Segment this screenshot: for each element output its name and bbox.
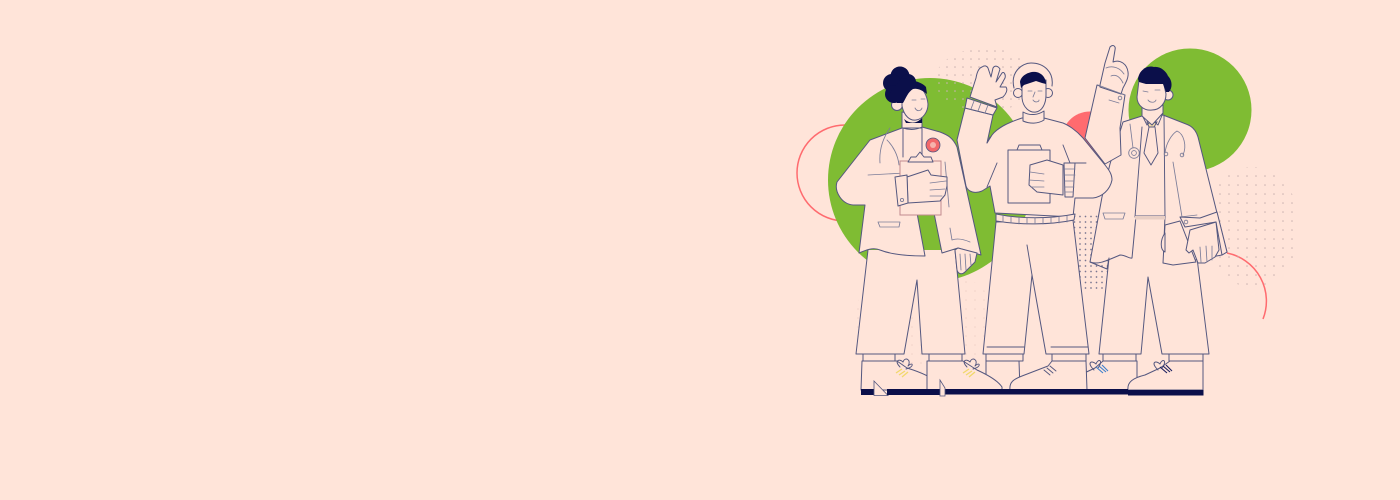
socks	[986, 354, 1086, 361]
head	[883, 66, 928, 120]
trousers	[1099, 258, 1209, 354]
waistband	[996, 214, 1075, 224]
socks	[863, 354, 962, 361]
hand with folder	[1186, 222, 1219, 263]
head	[1137, 67, 1173, 125]
shirt and tie	[1135, 113, 1165, 220]
shoe notch	[874, 381, 888, 396]
pointing hand	[1100, 46, 1128, 94]
trousers	[856, 250, 965, 354]
face features	[912, 99, 925, 111]
red arc right	[1227, 253, 1266, 319]
right sole	[1128, 390, 1204, 396]
collar and neck	[902, 112, 922, 128]
raised cuff	[965, 98, 997, 115]
coat	[1090, 115, 1227, 263]
head	[1013, 63, 1052, 112]
figure: person centre	[957, 63, 1112, 390]
shoe laces	[896, 359, 979, 377]
socks	[1103, 354, 1203, 361]
coat	[836, 127, 981, 256]
notch second shoe	[940, 380, 945, 396]
collar	[1023, 111, 1044, 123]
face features	[1143, 90, 1160, 102]
trousers	[983, 220, 1089, 354]
dots right	[1204, 167, 1300, 287]
face features	[1028, 91, 1042, 102]
clipboard	[1008, 145, 1050, 203]
figure: doctor right	[1063, 46, 1227, 390]
folder	[1163, 221, 1196, 265]
hand on clipboard	[907, 170, 947, 203]
raised sleeve	[1085, 85, 1125, 164]
dots lower left	[853, 268, 997, 372]
badge	[926, 138, 940, 152]
decorative circles and dots	[797, 48, 1300, 372]
raised arm and sweater	[957, 108, 1112, 217]
green circle right	[1128, 48, 1252, 172]
left sole remainder	[887, 389, 940, 395]
raised hand	[970, 66, 1007, 107]
clipboard	[900, 152, 941, 215]
red circle middle	[1062, 112, 1118, 168]
stethoscope	[1129, 124, 1185, 158]
shoes	[1063, 361, 1137, 390]
ground soles	[861, 380, 1204, 396]
dots middle	[1074, 214, 1108, 290]
red ring left	[797, 125, 893, 221]
dots top	[935, 48, 1035, 112]
shoe laces	[1090, 361, 1172, 373]
hair	[1020, 72, 1046, 88]
hand at side	[955, 248, 977, 274]
hair	[1138, 67, 1172, 92]
hand on clipboard	[1029, 160, 1063, 195]
stethoscope	[880, 128, 899, 165]
green circle left	[828, 78, 1032, 282]
cuff	[1064, 163, 1075, 197]
shoes	[986, 361, 1020, 390]
shoe laces	[1044, 366, 1056, 375]
long sole	[945, 389, 1128, 394]
shoes	[861, 361, 940, 390]
left sole	[861, 389, 887, 395]
coat details	[1103, 162, 1197, 219]
sleeve cuff	[895, 175, 908, 206]
figure: doctor left	[836, 66, 1002, 390]
hair	[883, 66, 927, 103]
sleeve right	[1180, 212, 1227, 255]
